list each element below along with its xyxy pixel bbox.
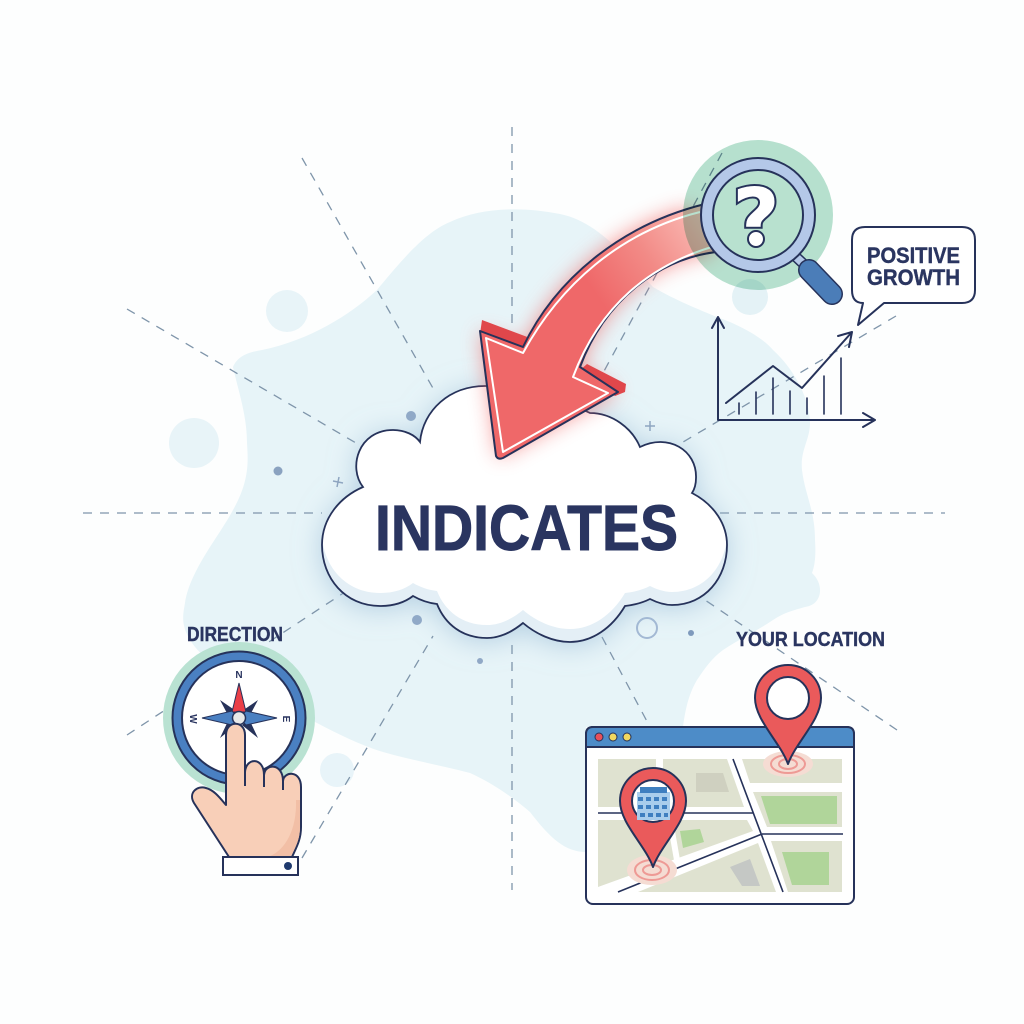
label: direction: DIRECTION	[187, 624, 283, 646]
icon: location pin with calendar	[620, 768, 686, 885]
map blocks and roads	[598, 759, 843, 892]
heading: INDICATES: INDICATES	[375, 492, 678, 564]
speech bubble: positive growth: POSITIVE	[867, 243, 960, 268]
label: your location: YOUR LOCATION	[736, 629, 885, 651]
icon: compass: N	[235, 670, 243, 681]
speech bubble: positive growth	[852, 227, 975, 325]
icon: compass: W	[187, 714, 198, 724]
icon: location pin on top edge	[755, 665, 821, 777]
decorative circles and dots	[169, 279, 768, 787]
icon: magnifying glass with question mark: ?	[732, 172, 780, 267]
dashed radial guide lines	[83, 127, 945, 890]
icon: compass	[163, 642, 315, 794]
growth line chart	[712, 317, 875, 427]
central cloud	[322, 373, 727, 642]
background blob	[183, 209, 820, 852]
speech bubble: positive growth: GROWTH	[867, 265, 960, 290]
icon: compass: E	[280, 716, 291, 723]
icon: magnifying glass with question mark	[701, 158, 832, 294]
red curved arrow	[480, 204, 725, 459]
green circle behind magnifier	[683, 140, 833, 290]
panel: browser map window	[586, 727, 854, 904]
icon: pointing hand with cuff	[192, 724, 301, 875]
